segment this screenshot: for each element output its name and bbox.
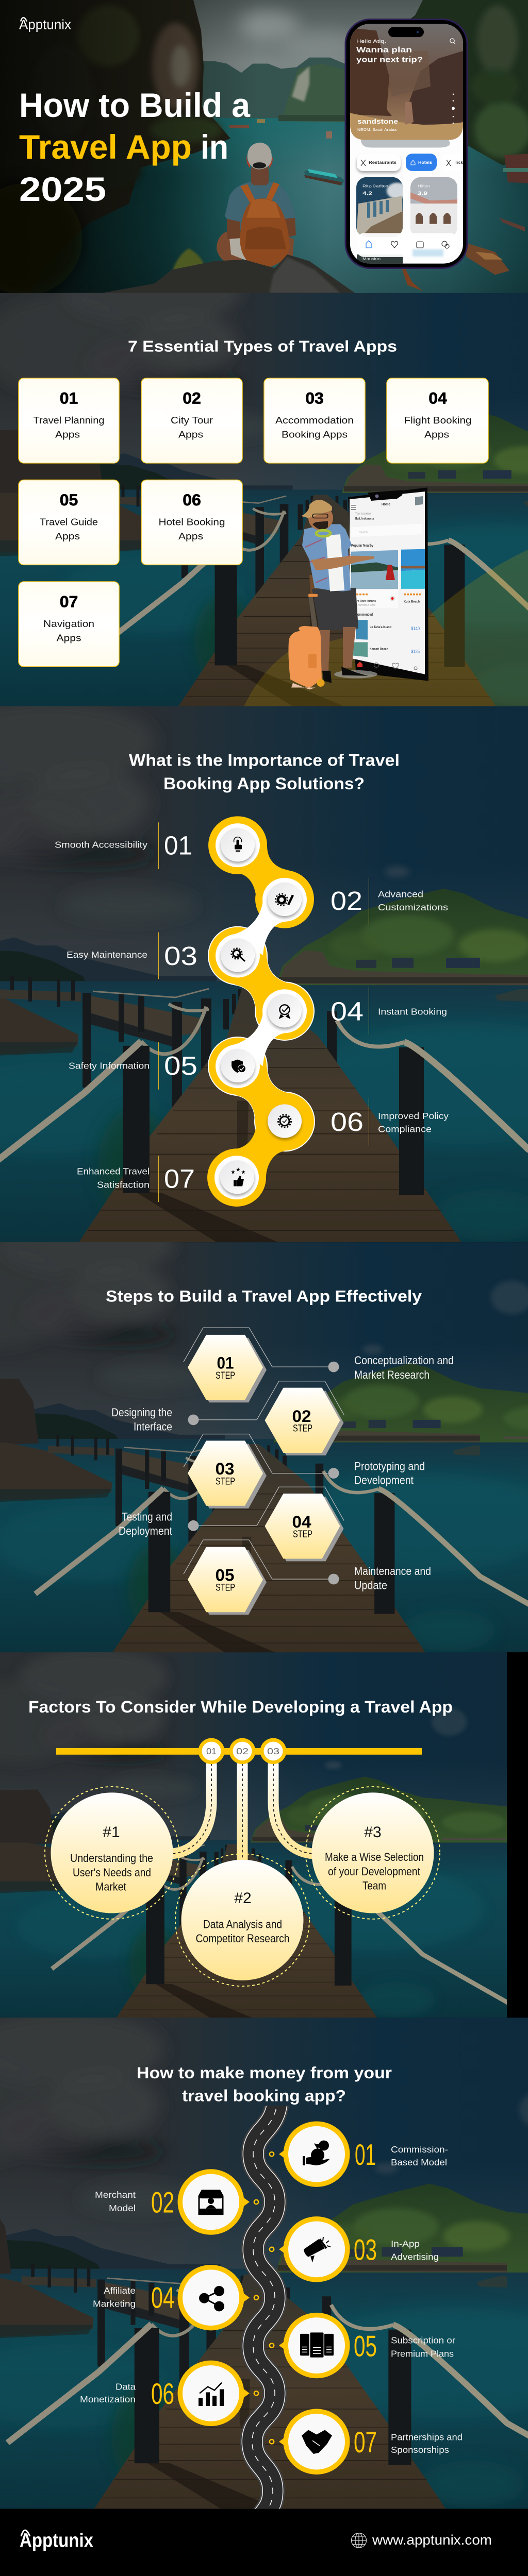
item 02: 02 — [151, 2187, 174, 2219]
heading: Factors To Consider While Developing a Travel App — [28, 1697, 453, 1716]
footer logo: Apptunix — [20, 2530, 93, 2552]
card 06: Hotel Booking — [159, 517, 225, 528]
item 07 — [270, 2409, 463, 2475]
step 01: Market Research — [354, 1368, 430, 1381]
item 04 — [331, 987, 447, 1035]
panel: importance of travel booking app solutions — [0, 655, 528, 1246]
phone mockup: 3.9 — [418, 191, 428, 196]
badge 03 — [260, 1738, 287, 1764]
item 05 — [270, 2313, 455, 2378]
item 01: 01 — [164, 831, 192, 860]
factor #2: Competitor Research — [196, 1932, 290, 1945]
section background photo — [0, 1970, 528, 2512]
phone mockup: Hilton — [418, 184, 430, 188]
step 02: Interface — [134, 1420, 172, 1433]
card 04 — [387, 378, 488, 463]
item 03: 03 — [354, 2234, 377, 2267]
title: in — [201, 129, 228, 166]
factor #1: Market — [95, 1880, 126, 1893]
item 06: Compliance — [378, 1124, 432, 1134]
section background photo — [0, 293, 528, 706]
card 06 — [141, 480, 242, 565]
item 07: Partnerships and — [391, 2432, 463, 2442]
card 01: Travel Planning — [33, 415, 105, 426]
step 05: Update — [354, 1579, 387, 1592]
phone mockup: Wanna plan — [356, 46, 412, 55]
icon: gear check — [278, 1115, 291, 1127]
step 02: STEP — [293, 1423, 312, 1434]
step 01: STEP — [216, 1370, 235, 1381]
phone with travel app: Bora Bora Islands — [353, 600, 376, 603]
phone with travel app: Bali, Indonesia — [355, 518, 374, 520]
footer — [0, 2509, 528, 2576]
road connectors — [170, 1764, 315, 1862]
item 02: Merchant — [95, 2190, 136, 2200]
card 03: Accommodation — [275, 415, 354, 426]
card 03: 03 — [305, 388, 324, 407]
card 06: Apps — [178, 531, 203, 542]
factor #1: #1 — [103, 1824, 120, 1841]
title: How to Build a — [19, 87, 251, 125]
step 05: Maintenance and — [354, 1565, 431, 1578]
item 04: Instant Booking — [378, 1007, 447, 1017]
card 01: 01 — [60, 388, 78, 407]
factor #3: #3 — [364, 1824, 382, 1841]
item 05: 05 — [164, 1050, 197, 1080]
traveller with suitcase — [288, 500, 377, 689]
step 02: 02 — [292, 1406, 311, 1426]
phone mockup: sandstone — [357, 117, 398, 125]
item 01: Based Model — [391, 2157, 447, 2167]
icon: money bag in hand — [303, 2140, 330, 2165]
item 03: In-App — [391, 2239, 420, 2249]
phone mockup: NEOM, Saudi Arabia — [357, 128, 397, 132]
factor #1: Understanding the — [70, 1852, 153, 1865]
phone mockup: Tick — [455, 160, 464, 165]
section background photo — [0, 1242, 528, 1653]
panel: factors to consider — [0, 1618, 528, 2020]
section background photo — [0, 655, 528, 1246]
logo: Apptunix — [19, 18, 71, 32]
card 03 — [264, 378, 365, 463]
item 07: Satisfaction — [97, 1180, 150, 1190]
step 03 — [184, 1434, 425, 1509]
phone with travel app: $125 — [411, 649, 420, 654]
factor #2: Data Analysis and — [203, 1918, 282, 1931]
step 03: 03 — [216, 1459, 235, 1478]
item 05: 05 — [354, 2330, 377, 2363]
badge 02: 02 — [236, 1746, 249, 1756]
phone mockup — [345, 20, 473, 268]
hero photo: traveller overlooking karst bay — [0, 0, 528, 295]
item 03 — [67, 933, 197, 979]
winding road — [252, 2097, 277, 2519]
card 07 — [19, 582, 119, 667]
icon: badge check — [279, 1005, 290, 1018]
item 02: 02 — [331, 886, 362, 916]
section background photo — [0, 1618, 526, 2020]
card 01 — [19, 378, 119, 463]
phone with travel app: Kuta Beach — [404, 601, 420, 603]
item 01 — [55, 822, 192, 869]
item 05: Safety Information — [69, 1060, 150, 1071]
item 01 — [270, 2121, 448, 2187]
icon: shield check — [232, 1059, 245, 1073]
card 07: Apps — [57, 633, 81, 644]
step 02: Designing the — [111, 1406, 172, 1419]
item 03 — [270, 2216, 439, 2282]
item 07: 07 — [354, 2426, 377, 2459]
chain graphic — [207, 816, 315, 1207]
icon: price plans — [300, 2332, 334, 2358]
step 04: 04 — [292, 1512, 311, 1531]
icon: megaphone — [304, 2237, 331, 2263]
badge 02 — [229, 1738, 256, 1764]
step 03: Development — [354, 1473, 414, 1486]
card 03: Booking Apps — [282, 430, 348, 440]
step 04 — [119, 1487, 344, 1561]
badge 01: 01 — [206, 1746, 217, 1756]
item 02 — [331, 878, 448, 925]
item 02: Customizations — [378, 902, 448, 912]
item 01: Commission- — [391, 2144, 448, 2155]
phone with travel app: Home — [382, 503, 390, 506]
phone with travel app: commended — [356, 613, 373, 617]
factor #3: of your Development — [328, 1865, 420, 1878]
icon: handshake — [302, 2430, 332, 2454]
timeline bar — [56, 1748, 422, 1755]
item 06: Improved Policy — [378, 1111, 449, 1121]
card 02: 02 — [183, 388, 201, 407]
step 01: Conceptualization and — [354, 1354, 454, 1367]
card 02 — [141, 378, 242, 463]
phone with travel app: Kamari Beach — [370, 648, 388, 651]
item 07 — [77, 1156, 195, 1202]
item 01: 01 — [355, 2139, 376, 2172]
step 03: Prototyping and — [354, 1460, 425, 1473]
icon: thumbs up with stars — [231, 1167, 245, 1186]
item 06: Monetization — [80, 2394, 136, 2404]
card 05: 05 — [60, 490, 78, 509]
card 07: 07 — [60, 592, 78, 611]
item 07: Sponsorships — [391, 2445, 449, 2455]
card 02: Apps — [178, 430, 203, 440]
step 04: Deployment — [119, 1524, 172, 1537]
phone with travel app: Popular Nearby — [351, 544, 373, 548]
factor #3: Make a Wise Selection — [325, 1851, 424, 1863]
item 02 — [95, 2169, 258, 2235]
icon: share network — [199, 2286, 224, 2311]
heading — [137, 2063, 392, 2105]
card 05: Travel Guide — [40, 517, 98, 528]
panel: hero — [0, 0, 528, 295]
factor #1: User's Needs and — [73, 1866, 151, 1879]
phone mockup: Mansion — [362, 257, 381, 261]
step 04: Testing and — [122, 1511, 172, 1523]
factor #3 — [306, 1787, 440, 1919]
item 06: 06 — [151, 2378, 174, 2411]
icon: wrench gear — [231, 948, 245, 961]
item 07: Enhanced Travel — [77, 1166, 150, 1177]
card 07: Navigation — [43, 619, 94, 630]
item 03: Easy Maintenance — [67, 950, 147, 960]
phone with travel app — [348, 487, 428, 681]
heading: 7 Essential Types of Travel Apps — [128, 337, 397, 355]
heading: What is the Importance of Travel — [129, 751, 400, 770]
step 03: STEP — [216, 1476, 235, 1487]
title: Travel App — [19, 129, 192, 166]
badge 01 — [198, 1738, 225, 1764]
item 02: Advanced — [378, 889, 423, 899]
phone mockup: Hello Atiq, — [356, 39, 386, 44]
factor #1 — [45, 1787, 179, 1919]
card 04: Apps — [424, 430, 449, 440]
website url: www.apptunix.com — [372, 2532, 492, 2548]
icon: rising bar chart — [199, 2383, 224, 2406]
item 05: Premium Plans — [391, 2348, 454, 2359]
factor #3: Team — [362, 1879, 386, 1892]
title: 2025 — [19, 171, 106, 209]
traveller — [217, 143, 296, 268]
factor #2 — [175, 1854, 309, 1986]
heading: How to make money from your — [137, 2063, 392, 2082]
card 05 — [19, 480, 119, 565]
icon: globe — [352, 2533, 366, 2548]
title — [19, 87, 251, 209]
item 05 — [69, 1042, 197, 1090]
item 06: Data — [116, 2382, 136, 2392]
phone with travel app: Search... — [359, 531, 370, 534]
card 04: 04 — [428, 388, 447, 407]
step 05: STEP — [216, 1582, 235, 1594]
step 01: 01 — [217, 1353, 234, 1372]
step 04: STEP — [293, 1529, 312, 1540]
phone with travel app: Le Taha'a Island — [370, 626, 391, 629]
card 01: Apps — [55, 430, 80, 440]
card 06: 06 — [183, 490, 201, 509]
phone mockup: your next trip? — [356, 56, 423, 64]
item 03: 03 — [164, 941, 197, 971]
heading: Booking App Solutions? — [163, 774, 365, 793]
item 07: 07 — [164, 1164, 195, 1193]
step 01 — [184, 1328, 454, 1402]
item 04: Affiliate — [104, 2285, 136, 2296]
icon: merchant kiosk — [199, 2190, 223, 2215]
item 04 — [93, 2265, 258, 2330]
phone mockup: Ritz-Carlton — [362, 184, 388, 188]
item 01: Smooth Accessibility — [55, 840, 147, 850]
card 05: Apps — [55, 531, 80, 542]
panel: steps to build — [0, 1242, 528, 1653]
item 06 — [80, 2361, 258, 2426]
item 04: 04 — [331, 996, 364, 1026]
phone with travel app: Your Location — [355, 513, 371, 516]
item 02: Model — [109, 2203, 136, 2213]
phone with travel app: $140 — [411, 626, 420, 631]
step 05 — [184, 1540, 431, 1615]
icon: tap — [234, 837, 242, 852]
item 04: Marketing — [93, 2299, 136, 2309]
item 06 — [331, 1098, 449, 1145]
panel: 7 essential types — [0, 293, 528, 706]
factor #2: #2 — [234, 1890, 252, 1907]
step 02 — [111, 1381, 344, 1455]
heading: travel booking app? — [182, 2087, 346, 2105]
phone with travel app: Polynesia, France — [357, 603, 375, 606]
heading — [129, 751, 400, 793]
item 03: Advertising — [391, 2252, 439, 2262]
phone mockup: 4.2 — [362, 191, 373, 196]
item 04: 04 — [151, 2282, 175, 2314]
step 05: 05 — [216, 1566, 235, 1584]
icon: gear and pencil — [275, 894, 293, 906]
card 02: City Tour — [171, 415, 213, 426]
badge 03: 03 — [267, 1746, 279, 1756]
card 04: Flight Booking — [404, 415, 471, 426]
heading: Steps to Build a Travel App Effectively — [106, 1287, 422, 1306]
phone mockup: Hotels — [418, 160, 433, 165]
item 05: Subscription or — [391, 2335, 455, 2346]
panel: how to make money — [0, 2018, 528, 2509]
phone mockup: Restaurants — [369, 160, 397, 165]
item 06: 06 — [331, 1107, 364, 1137]
